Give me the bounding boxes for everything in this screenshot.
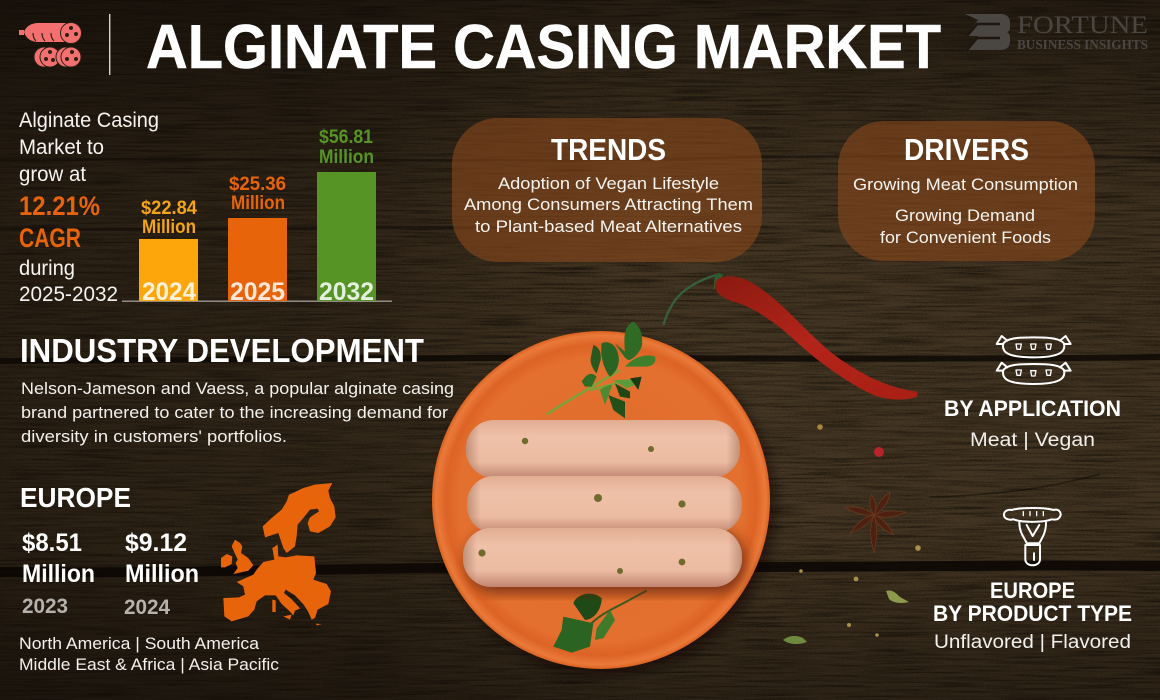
divider (109, 14, 110, 75)
stat: Europe 2024: 2024 (124, 596, 170, 619)
bar 2025: $25.36 (229, 174, 286, 195)
panel: trends: Among Consumers Attracting Them (464, 195, 753, 214)
bar 2032 (317, 127, 376, 306)
other regions list: Middle East & Africa | Asia Pacific (19, 655, 279, 674)
bar 2032: 2032 (319, 278, 374, 306)
panel: drivers: Growing Meat Consumption (853, 175, 1078, 194)
icon: sausage on fork (1004, 508, 1061, 565)
logo: Fortune Business Insights: FORTUNE (1017, 12, 1148, 39)
parsley top (547, 322, 655, 418)
text block: industry development: Nelson-Jameson and Vaess, a popular alginate casing (21, 379, 454, 398)
CAGR statement: 2025-2032 (19, 283, 118, 306)
bar 2025 (228, 174, 287, 306)
illustration: red chili (663, 273, 917, 400)
panel: drivers (838, 121, 1095, 261)
panel: drivers: DRIVERS (904, 132, 1029, 167)
stat: Europe 2024: $9.12 (125, 529, 187, 557)
title: ALGINATE CASING MARKET (146, 13, 941, 82)
peppercorns (478, 438, 686, 574)
logo: Fortune Business Insights: BUSINESS INSIGHTS (1017, 37, 1148, 52)
bar 2032: Million (319, 147, 374, 168)
icon: two sausages (997, 336, 1071, 384)
other regions list (19, 634, 279, 674)
label: by application: Meat | Vegan (970, 430, 1095, 451)
panel: trends: Adoption of Vegan Lifestyle (498, 174, 719, 193)
label: Europe by product type (933, 578, 1132, 653)
parsley bottom (553, 591, 647, 653)
stat: Europe 2023: 2023 (22, 595, 68, 618)
bar 2024: $22.84 (141, 198, 197, 219)
sausages (463, 420, 742, 587)
bar 2024: Million (142, 217, 196, 238)
stat: Europe 2023 (22, 529, 95, 618)
panel: drivers: Growing Demand (895, 206, 1035, 225)
heading: Europe: EUROPE (20, 482, 131, 513)
panel: trends (452, 118, 762, 262)
bar 2032: $56.81 (319, 127, 373, 148)
CAGR statement: Market to (19, 136, 104, 159)
CAGR statement: CAGR (19, 223, 81, 253)
text block: industry development: brand partnered to cater to the increasing demand for (21, 403, 448, 422)
label: Europe by product type: Unflavored | Flavored (934, 632, 1131, 653)
panel: trends: TRENDS (551, 132, 666, 167)
label: Europe by product type: BY PRODUCT TYPE (933, 601, 1132, 626)
CAGR statement: grow at (19, 163, 86, 186)
bar 2024: 2024 (142, 278, 196, 306)
label: by application (944, 396, 1121, 451)
logo: Fortune Business Insights (965, 12, 1148, 52)
CAGR statement: Alginate Casing (19, 109, 159, 132)
icon: map of Europe (221, 483, 336, 625)
stat: Europe 2023: Million (22, 560, 95, 588)
star anise (844, 491, 906, 553)
heading: industry development: INDUSTRY DEVELOPMENT (20, 332, 424, 369)
stat: Europe 2023: $8.51 (22, 529, 82, 557)
bar chart: market size (122, 127, 392, 306)
sausage shadow (466, 530, 746, 594)
illustration: scattered spices (783, 424, 921, 644)
panel: trends: to Plant-based Meat Alternatives (475, 217, 742, 236)
label: Europe by product type: EUROPE (990, 578, 1075, 603)
bar 2025: 2025 (230, 278, 285, 306)
CAGR statement: 12.21% (19, 191, 100, 221)
CAGR statement (19, 109, 159, 306)
panel: drivers: for Convenient Foods (880, 228, 1051, 247)
bar 2025: Million (231, 193, 285, 214)
stat: Europe 2024: Million (125, 560, 199, 588)
icon: sausage logo (19, 22, 82, 67)
stat: Europe 2024 (124, 529, 199, 619)
label: by application: BY APPLICATION (944, 396, 1121, 421)
CAGR statement: during (19, 257, 75, 280)
text block: industry development: diversity in customers' portfolios. (21, 427, 287, 446)
text block: industry development (21, 379, 454, 446)
other regions list: North America | South America (19, 634, 260, 653)
bar 2024 (139, 198, 198, 306)
illustration: plate of sausages (432, 322, 776, 676)
